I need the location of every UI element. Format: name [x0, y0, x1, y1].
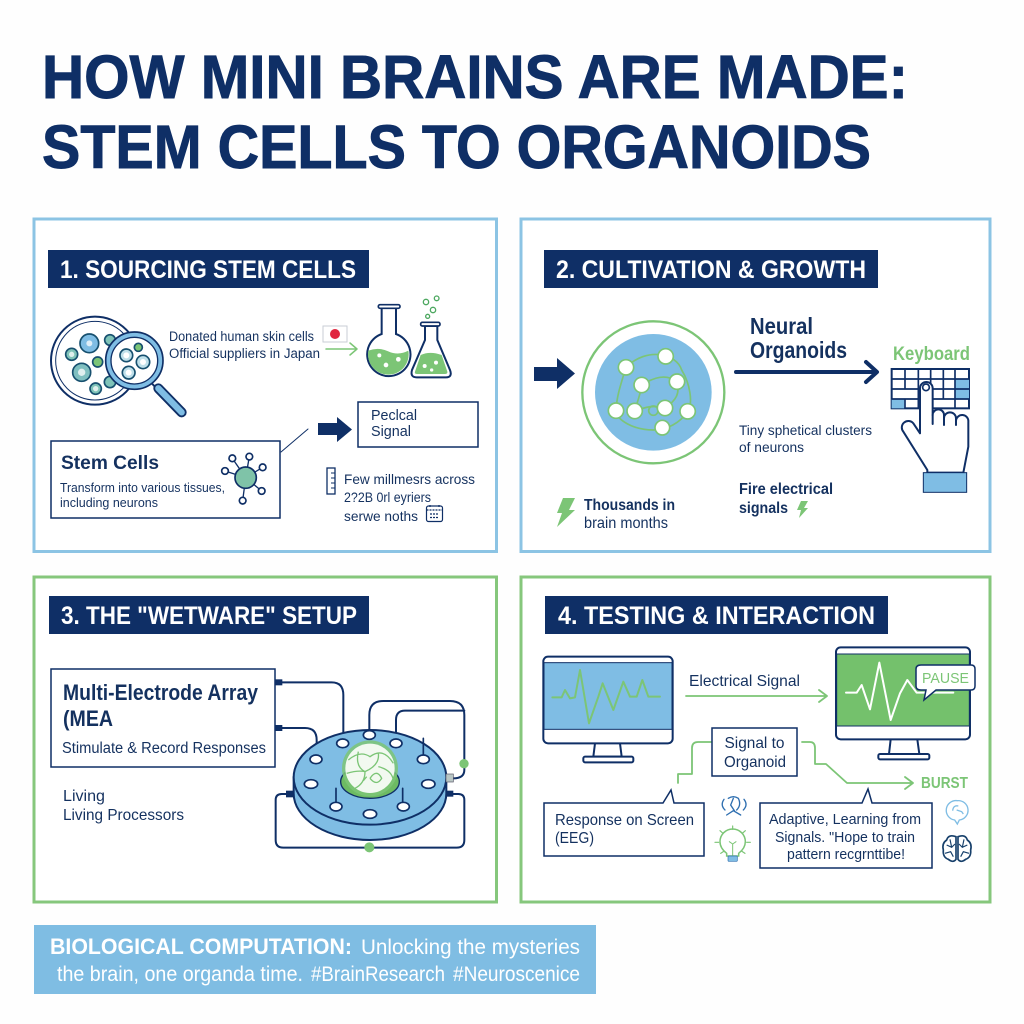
text: size and age: Few millmesrs across: [344, 471, 475, 487]
callout: response on screen: (EEG): [555, 830, 594, 847]
icon: ruler: [327, 468, 335, 494]
callout: pause: PAUSE: [922, 670, 969, 687]
title: [42, 43, 908, 181]
arrow: to signal box: [318, 417, 352, 442]
text: living processors: [63, 788, 184, 824]
footer banner: #Neuroscenice: [453, 962, 580, 986]
box: stem cells: Stem Cells: [61, 452, 159, 474]
box: signal to organoid: [712, 728, 797, 776]
callout: response on screen: Response on Screen: [555, 812, 694, 829]
title: HOW MINI BRAINS ARE MADE:: [42, 43, 908, 111]
text: thousands in brain months: [584, 497, 675, 532]
callout: adaptive learning: Signals. "Hope to train: [775, 829, 915, 846]
callout: adaptive learning: Adaptive, Learning from: [769, 811, 921, 828]
heading: cultivation and growth: [544, 250, 878, 288]
heading: testing and interaction: 4. TESTING & INTERACTION: [558, 602, 875, 630]
box: stem cells: Transform into various tissues,: [60, 480, 225, 495]
text: size and age: [344, 471, 475, 524]
text: fire electrical signals: Fire electrical: [739, 481, 833, 498]
box: multi-electrode array: Multi-Electrode Array: [63, 680, 259, 705]
heading: sourcing stem cells: [48, 250, 369, 288]
footer banner: BIOLOGICAL COMPUTATION:: [50, 934, 352, 959]
footer banner: #BrainResearch: [311, 962, 445, 986]
icon: lab flasks: [367, 296, 451, 377]
arrow: to flasks: [326, 343, 357, 355]
diagram: electrode array with organoid: [275, 679, 469, 852]
box: stem cells: including neurons: [60, 495, 158, 510]
icon: brain signal: [722, 797, 746, 815]
icon: head speech bubble: [946, 801, 968, 824]
connector: signal to response: [678, 742, 711, 783]
text: tiny clusters: Tiny sphetical clusters: [739, 423, 872, 438]
text: fire electrical signals: [739, 481, 833, 517]
footer banner: the brain, one organda time.: [57, 962, 303, 986]
arrow: signal to burst: [802, 742, 913, 789]
panel: 1. sourcing stem cells: [34, 219, 496, 552]
box: signal to organoid: Signal to: [724, 735, 785, 752]
box: multi-electrode array: Stimulate & Record Responses: [62, 740, 266, 757]
icon: brain: [943, 836, 971, 861]
text: donated skin cells: Donated human skin cells: [169, 329, 314, 344]
panel: 4. testing and interaction: [521, 577, 990, 902]
heading: testing and interaction: [545, 596, 888, 634]
box: multi-electrode array: (MEA: [63, 706, 113, 731]
callout: adaptive learning: [760, 789, 932, 868]
box: multi-electrode array: [51, 669, 275, 767]
heading: sourcing stem cells: 1. SOURCING STEM CELLS: [60, 256, 356, 284]
text: thousands in brain months: Thousands in: [584, 497, 675, 514]
text: donated skin cells: [169, 329, 320, 361]
label: neural organoids: Organoids: [750, 337, 847, 363]
title: STEM CELLS TO ORGANOIDS: [42, 113, 871, 181]
panel: 2. cultivation and growth: [521, 219, 990, 552]
icon: calendar: [426, 505, 442, 522]
label: burst: BURST: [921, 775, 968, 792]
panel: 3. the wetware setup: [34, 577, 496, 902]
icon: japan flag: [323, 326, 347, 342]
arrow: to keyboard: [736, 362, 877, 382]
text: tiny clusters: of neurons: [739, 440, 804, 455]
box: signal to organoid: Organoid: [724, 754, 786, 771]
box: pecical signal: Signal: [371, 423, 411, 440]
label: neural organoids: [750, 313, 847, 363]
icon: keyboard and hand: [892, 369, 969, 492]
box: pecical signal: Peclcal: [371, 407, 417, 424]
icon: right monitor: [836, 647, 970, 759]
icon: organoid culture: [582, 321, 724, 463]
footer banner: [34, 925, 596, 994]
text: living processors: Living Processors: [63, 807, 184, 824]
heading: wetware setup: [49, 596, 369, 634]
callout: response on screen: [544, 790, 704, 856]
footer banner: Unlocking the mysteries: [361, 935, 580, 959]
icon: light bulb: [715, 826, 750, 861]
connector line: [281, 429, 308, 452]
callout: pause: [916, 665, 975, 700]
arrow: into dish: [534, 358, 575, 389]
text: donated skin cells: Official suppliers in Japan: [169, 346, 320, 361]
text: electrical signal: Electrical Signal: [689, 673, 800, 690]
text: tiny clusters: [739, 423, 872, 455]
text: size and age: 2?2B 0rl eyriers: [344, 489, 431, 505]
heading: wetware setup: 3. THE "WETWARE" SETUP: [61, 602, 357, 630]
text: living processors: Living: [63, 788, 105, 805]
text: thousands in brain months: brain months: [584, 515, 668, 532]
callout: adaptive learning: pattern recgrnttibe!: [787, 846, 905, 863]
icon: small bolt: [797, 501, 808, 518]
icon: left monitor: [543, 657, 673, 762]
text: size and age: serwe noths: [344, 508, 418, 524]
box: stem cells: [51, 441, 280, 518]
text: fire electrical signals: signals: [739, 500, 788, 517]
box: pecical signal: [358, 402, 478, 447]
heading: cultivation and growth: 2. CULTIVATION & GROWTH: [556, 256, 866, 284]
icon: stem cell: [222, 453, 266, 504]
icon: petri dish with magnifier: [51, 317, 182, 412]
icon: large bolt: [557, 498, 575, 527]
label: neural organoids: Neural: [750, 313, 813, 339]
label: keyboard: Keyboard: [893, 344, 970, 365]
arrow: electrical signal: [686, 690, 827, 702]
